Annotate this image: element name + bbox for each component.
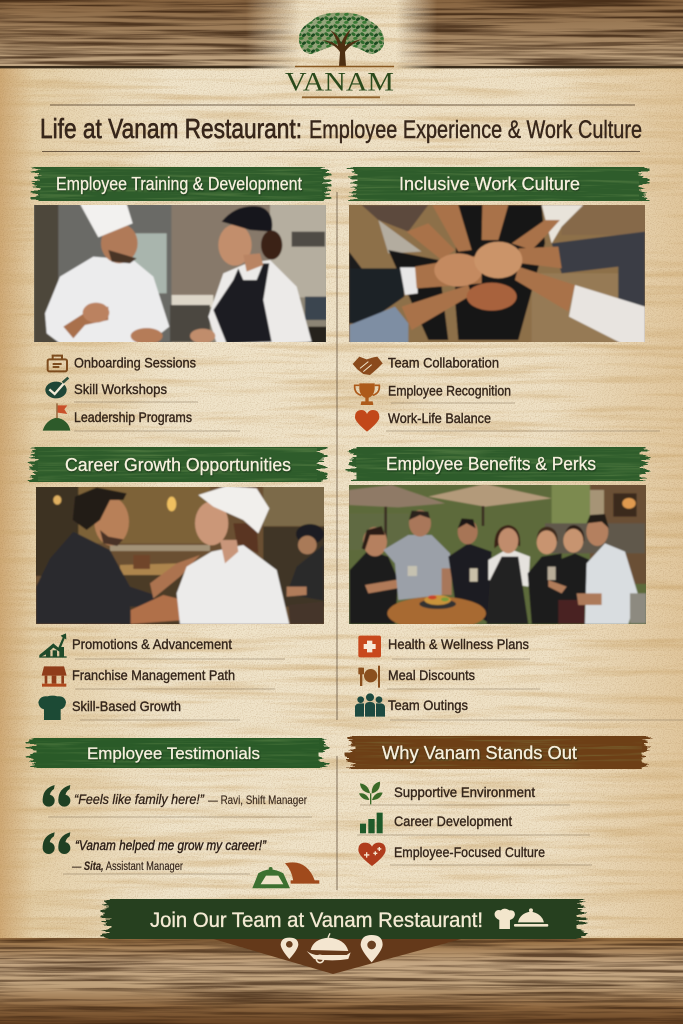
list: growth items	[38, 633, 285, 720]
icon: chef hat	[495, 909, 515, 929]
brown wedge	[210, 938, 465, 974]
column divider	[336, 192, 338, 890]
photo: chefs talking in a kitchen	[34, 205, 326, 342]
heading banner	[31, 738, 324, 768]
heading banner	[350, 736, 647, 769]
list: reasons: Supportive Environment	[394, 784, 535, 800]
icon: health cross	[358, 636, 381, 657]
list: training items: Onboarding Sessions	[74, 354, 196, 370]
icon: team group	[355, 693, 385, 717]
title	[40, 105, 642, 152]
heading banner	[352, 167, 644, 201]
list: benefit items: Team Outings	[388, 697, 468, 713]
icon: handshake	[353, 357, 383, 375]
list: training items	[43, 354, 240, 431]
heading banner	[351, 447, 645, 481]
icon: bars	[360, 813, 383, 833]
panel: Employee Training & Development	[30, 167, 330, 431]
panel: Employee Testimonials	[31, 738, 324, 888]
list: reasons: Employee-Focused Culture	[394, 844, 545, 860]
list: culture items: Team Collaboration	[388, 354, 499, 370]
photo: manager and chef handshake	[36, 487, 324, 624]
list: training items: Skill Workshops	[74, 381, 167, 397]
testimonial: Sita	[43, 832, 266, 874]
icon: quote marks	[43, 832, 70, 854]
logo wordmark: VANAM	[285, 68, 394, 96]
icon: heart	[355, 410, 379, 432]
icon: quote marks	[43, 785, 70, 807]
icon: plate and cutlery	[358, 666, 380, 688]
call to action banner	[106, 899, 582, 974]
heading banner: Career Growth Opportunities	[65, 455, 291, 475]
list: reasons: Career Development	[394, 813, 512, 829]
list: training items: Leadership Programs	[74, 409, 192, 425]
list: growth items: Franchise Management Path	[72, 667, 235, 683]
panel: Career Growth Opportunities	[30, 447, 330, 720]
heading banner	[33, 447, 322, 482]
icon: storefront	[42, 666, 67, 687]
list: culture items	[353, 354, 660, 432]
heading banner: Employee Testimonials	[87, 744, 260, 763]
title: Life at Vanam Restaurant:	[40, 113, 302, 144]
wood footer band	[0, 938, 683, 1024]
heading banner: Why Vanam Stands Out	[382, 743, 577, 763]
icon: trophy	[355, 383, 379, 405]
list: growth items: Skill-Based Growth	[72, 698, 181, 714]
list: benefit items: Health & Wellness Plans	[388, 636, 529, 652]
heading banner: Employee Benefits & Perks	[386, 454, 596, 474]
heading banner: Inclusive Work Culture	[399, 174, 580, 194]
testimonial: Ravi: — Ravi, Shift Manager	[208, 793, 307, 807]
icon: location pin right	[361, 935, 383, 962]
icon: briefcase clipboard	[48, 356, 67, 371]
panel: Inclusive Work Culture	[345, 167, 660, 432]
icon: heart with plus signs	[358, 843, 386, 866]
testimonial: Ravi: “Feels like family here!”	[74, 792, 204, 807]
list: benefit items	[355, 636, 683, 720]
heading banner: Employee Training & Development	[56, 174, 302, 194]
panel: Why Vanam Stands Out	[350, 736, 647, 866]
panel: Employee Benefits & Perks	[345, 447, 683, 720]
wood header band	[0, 0, 683, 68]
testimonial: Sita: — Sita, Assistant Manager	[72, 861, 183, 873]
icon: location pin left	[281, 938, 298, 959]
icon: green and brown cloches	[252, 862, 319, 888]
list: growth items: Promotions & Advancement	[72, 636, 232, 652]
heading banner	[36, 167, 326, 201]
icon: sprout	[359, 782, 383, 804]
icon: rising chart	[39, 633, 67, 658]
logo: Vanam tree	[285, 13, 394, 97]
icon: skill check badge	[45, 378, 68, 398]
icon: chef jacket	[38, 696, 66, 720]
icon: flag on hill	[43, 403, 70, 431]
testimonial: Ravi	[43, 785, 312, 817]
list: benefit items: Meal Discounts	[388, 667, 475, 683]
icon: footer cloche	[307, 933, 351, 963]
list: culture items: Employee Recognition	[388, 382, 511, 398]
photo: staff group on patio	[345, 480, 650, 630]
icon: serving cloche	[514, 908, 548, 927]
testimonial: Sita: “Vanam helped me grow my career!”	[75, 838, 266, 853]
list: reasons	[357, 782, 592, 866]
list: culture items: Work-Life Balance	[388, 410, 491, 426]
photo: team hands stacked	[349, 205, 645, 342]
call to action banner: Join Our Team at Vanam Restaurant!	[150, 909, 483, 932]
